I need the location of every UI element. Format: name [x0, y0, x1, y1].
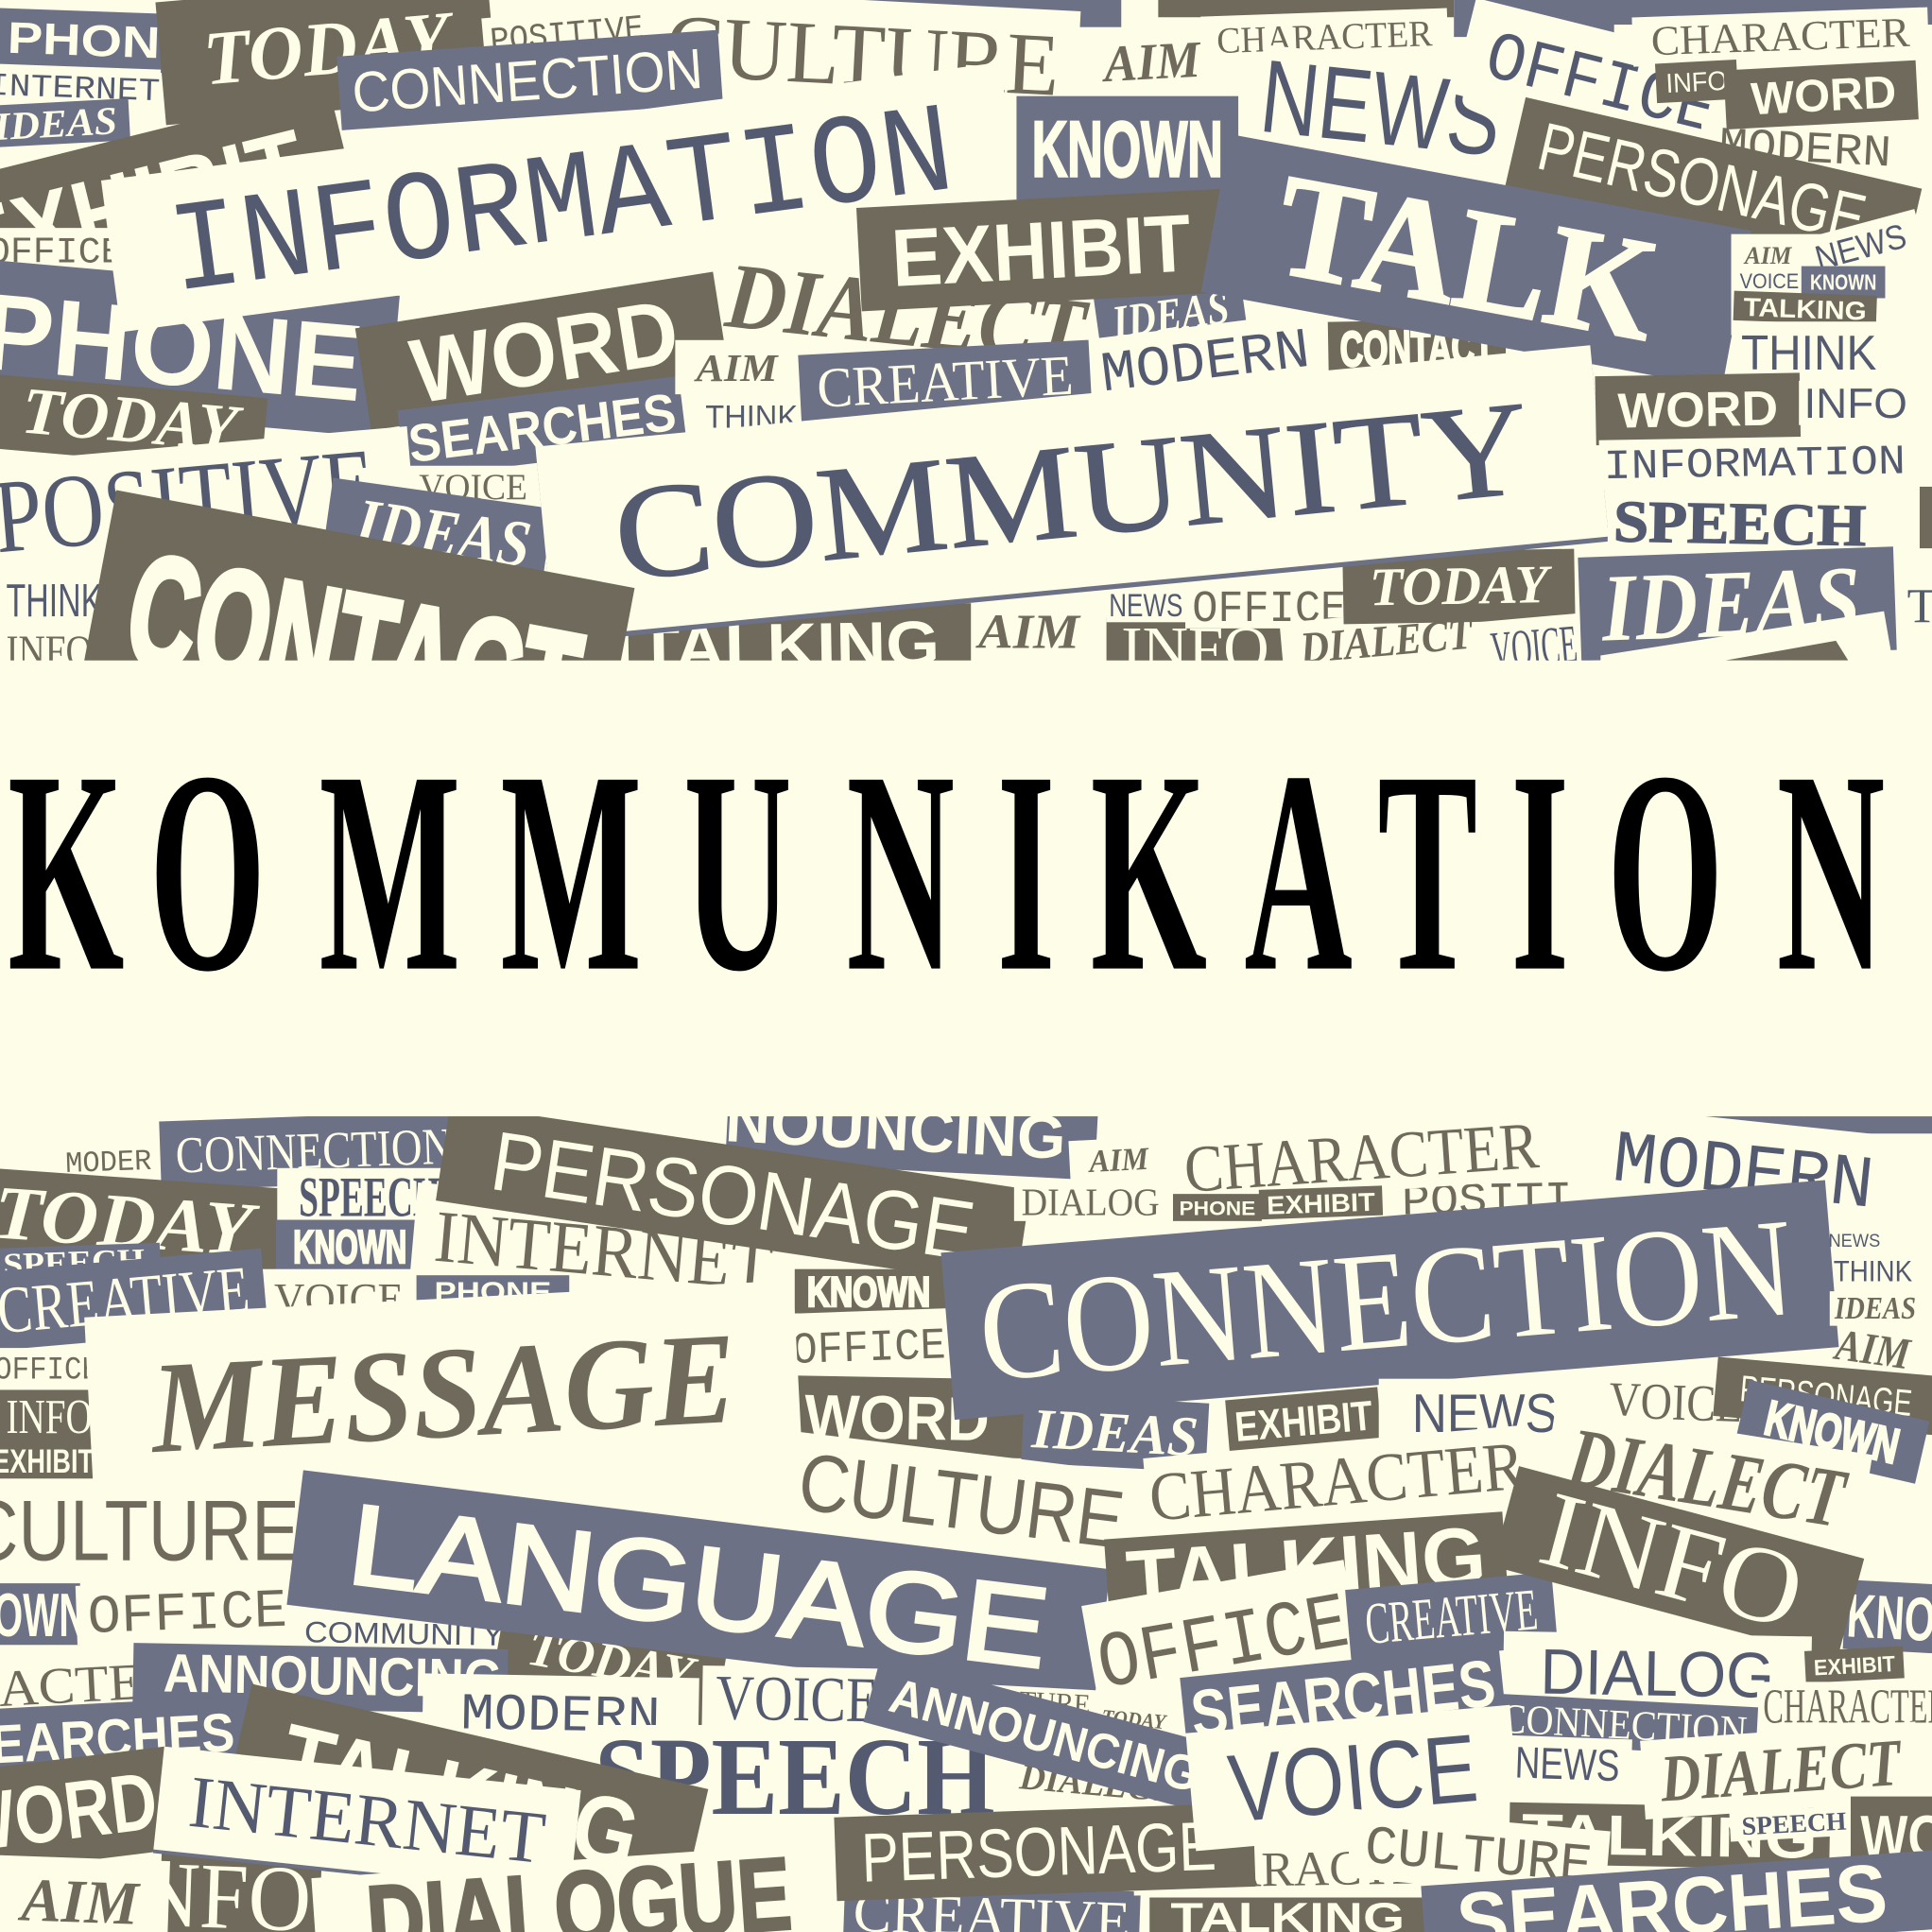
tag: MODERN lower: MODERN: [460, 1685, 661, 1748]
tag: CULTURE tiny: CULTURE: [966, 1682, 1091, 1721]
tag: COMMUNITY: [535, 345, 1609, 643]
tag: TALKING middle: TALKING: [1124, 1509, 1489, 1628]
tag: CREATIVE left: CREATIVE: [0, 1252, 252, 1348]
tag: DIALECT tiny: DIALECT: [1017, 1756, 1177, 1810]
tag: NEWS tiny right: NEWS: [1828, 1231, 1880, 1251]
tag: SEARCHES middle: SEARCHES: [1187, 1645, 1499, 1751]
tag: PERSONAGE lower: PERSONAGE: [860, 1808, 1217, 1897]
tag: CONTACT small: CONTACT: [1339, 319, 1494, 377]
tag: VOICE left: VOICE: [419, 467, 527, 508]
tag: INTERNET lower: [153, 1747, 581, 1897]
tag: PHONE small bottom: [417, 1275, 569, 1308]
tag: MODERN bottom: [1567, 1103, 1932, 1238]
tag: THINK tiny right: THINK: [1834, 1255, 1912, 1288]
tag: INFO low: INFO: [1121, 615, 1269, 683]
tag: VOICE low: [1476, 612, 1592, 682]
tag: AIM right: AIM: [1830, 1320, 1915, 1380]
tag: EXHIBIT: EXHIBIT: [889, 198, 1193, 304]
tag: CHARACTER top: CHARACTER: [1216, 13, 1434, 61]
tag: DIALECT right: DIALECT: [1561, 1411, 1854, 1546]
tag: NEWS lower: [1379, 1379, 1591, 1448]
right word cluster: [1828, 1231, 1932, 1380]
tag: CREATIVE lower: CREATIVE: [1363, 1576, 1540, 1657]
tag: TODAY low: TODAY: [1369, 555, 1553, 617]
tag: CONNECTION bottom small: CONNECTION: [175, 1116, 454, 1184]
tag: MESSAGE: [84, 1280, 802, 1505]
tag: OFFICE rotated: OFFICE: [1477, 19, 1724, 151]
tag: CONTACT: CONTACT: [114, 521, 593, 778]
tag: WN left: [0, 1580, 86, 1649]
tag: MODERN bottom: MODERN: [1609, 1119, 1877, 1230]
tag: SPEECH large: SPEECH: [595, 1716, 995, 1838]
tag: WORD right: WORD: [1617, 382, 1779, 440]
tag: VOICE bottom: VOICE: [274, 1275, 404, 1324]
tag: EXHIBIT tiny: EXHIBIT: [1267, 1187, 1376, 1220]
tag: INFORMATION: INFORMATION: [162, 81, 962, 329]
tag: AIM tiny: AIM: [1743, 242, 1792, 269]
tag: KNOWN bottom: [276, 1220, 419, 1274]
tag: POSITIVE top: POSITIVE: [489, 9, 646, 61]
tag: OFFICE low: OFFICE: [1192, 585, 1346, 635]
tag: INFO large: [1491, 1458, 1867, 1666]
tag: WORD top right: WORD: [1750, 66, 1898, 125]
tag: SPEECH bottom: [277, 1166, 450, 1229]
tag: AIM mid: AIM: [693, 347, 780, 390]
tag: THINK mid: THINK: [705, 399, 798, 435]
tag: NEWS low: NEWS: [1109, 588, 1182, 624]
tag: CHARACTER top right: CHARACTER: [1650, 9, 1911, 64]
word collage: top section: [0, 0, 1932, 794]
tag: COMMUNITY: COMMUNITY: [608, 372, 1536, 609]
tag: DIALOG bottom: DIALOG: [1022, 1181, 1160, 1224]
tag: DIALECT: DIALECT: [720, 244, 1093, 385]
tag: AIM bottom: [1068, 1136, 1169, 1183]
tag: AIM bottom: AIM: [1087, 1142, 1151, 1180]
tag: WORD: WORD: [405, 281, 685, 423]
tag: TODAY low middle: TODAY: [524, 1618, 701, 1704]
tag: PHONE: PHON: [7, 13, 161, 67]
tag: EXHIBIT lower: EXHIBIT: [1233, 1392, 1374, 1451]
word collage: bottom section: [0, 1080, 1932, 1932]
tag: SPEECH right: SPEECH: [1613, 488, 1867, 559]
tag: CONNECTION large: CONNECTION: [974, 1190, 1799, 1411]
tag: LANGUAGE: [286, 1470, 1111, 1704]
tag: MODERN right: MODERN: [1717, 121, 1892, 181]
tag: INFO small: INFO: [1665, 66, 1728, 99]
tag: MODERN right: [1699, 115, 1911, 181]
tag: TALKING small: TALKING: [1743, 292, 1867, 326]
tag: KNOWN tiny: KNOWN: [1810, 269, 1876, 294]
tag: VOICE middle: VOICE: [716, 1662, 879, 1735]
tag: CONNECTION lower: CONNECTION: [1500, 1696, 1749, 1754]
tag: PHONE tiny: [1173, 1194, 1262, 1221]
tag: INFO low left: INFO: [7, 627, 93, 676]
tag: TALK: [1201, 132, 1751, 388]
tag: IDEAS lower: IDEAS: [1029, 1397, 1199, 1468]
tag: THINK low left: THINK: [7, 575, 102, 627]
tag: KNOWN tiny: [1802, 267, 1885, 298]
tag: PERSONAGE right: [1713, 1357, 1932, 1435]
tag: CREATIVE lower: [1345, 1572, 1558, 1664]
tag: IDEAS left low: IDEAS: [351, 485, 535, 582]
small word cluster: [1732, 209, 1932, 336]
tag: VOICE low: VOICE: [1489, 614, 1579, 681]
tag: MODERN small left: MODER: [65, 1146, 152, 1182]
tag: CULTURE bottom: CULTURE: [1362, 1818, 1595, 1898]
tag: OFFICE middle: OFFICE: [791, 1321, 947, 1377]
tag: CONTACT: [78, 490, 634, 794]
tag: OFFICE left bottom: OFFICE: [87, 1581, 288, 1649]
tag: SPEECH small: SPEECH: [3, 1243, 146, 1283]
tag: CHARACTER bottom low: CHARACTER: [1158, 1840, 1455, 1899]
tag: VOICE tiny: VOICE: [1740, 269, 1799, 293]
tag: TALKING bottom: [1149, 1895, 1425, 1932]
tag: SPEECH tiny: SPEECH: [1741, 1807, 1847, 1840]
tag: TODAY low: [1342, 549, 1576, 624]
tag: NEWS bottom: NEWS: [1514, 1737, 1620, 1790]
tag: PHONE small bottom: PHONE: [435, 1278, 551, 1308]
tag: AIM low: [971, 600, 1099, 662]
tag: INTERNET lower: INTERNET: [185, 1760, 549, 1879]
tag: AIM bottom left: [0, 1855, 170, 1932]
tag: AIM top: AIM: [1100, 30, 1203, 93]
tag: INFO right: INFO: [1803, 381, 1907, 427]
tag: NEWS top: NEWS: [1255, 39, 1507, 179]
tag: AIM mid: [675, 340, 799, 394]
title band: [0, 661, 1932, 1116]
tag: ANNOUNCING rotated: ANNOUNCING: [884, 1668, 1205, 1803]
tag: IDEAS right: IDEAS: [1599, 545, 1862, 662]
tag: DIALECT low: DIALECT: [1298, 609, 1476, 673]
tag: CONNECTION top: CONNECTION: [350, 37, 705, 125]
tag: TODAY left: TODAY: [19, 373, 246, 467]
tag: KNOWN brown: KNOWN: [807, 1269, 930, 1316]
tag: PHONE: [0, 8, 186, 74]
tag: ANNOUNCING left: ANNOUNCING: [163, 1644, 503, 1710]
tag: COMMUNITY small: COMMUNITY: [304, 1615, 505, 1652]
tag: cream wedge under IDEAS: [1600, 612, 1892, 661]
tag: TODAY top: [155, 0, 497, 125]
tag: INFORMATION right: INFORMATION: [1603, 440, 1906, 492]
tag: KNOWN top: KNOWN: [1032, 104, 1223, 193]
tag: IDEAS mid: IDEAS: [1108, 281, 1233, 349]
title: KOMMUNIKATION: KOMMUNIKATION: [8, 711, 1885, 1031]
tag: EXHIBIT tiny right: EXHIBIT: [1813, 1651, 1896, 1680]
tag: CHARACTER lower: CHARACTER: [1147, 1426, 1527, 1536]
tag: KNOWN top: [1016, 96, 1238, 199]
tag: VOICE large: VOICE: [1224, 1714, 1481, 1843]
tag: TALK: TALK: [1265, 145, 1669, 371]
tag: CREATIVE top: CREATIVE: [816, 344, 1075, 420]
tag: INFO large: INFO: [1529, 1468, 1816, 1652]
tag: MESSAGE: MESSAGE: [146, 1305, 739, 1480]
tag: ANNOUNCING top: ANNOUNCING: [633, 1080, 1067, 1172]
tag: DIALOG right: DIALOG: [1540, 1637, 1775, 1712]
tag: TALKING bottom right: TALKING: [1521, 1802, 1818, 1871]
tag: SPEECH bottom: SPEECH: [299, 1166, 440, 1229]
tag: MODERN rotated: MODERN: [1097, 319, 1314, 408]
tag: OFFICE rotated bottom: OFFICE: [1092, 1580, 1355, 1712]
tag: CONTACT small: [1328, 319, 1506, 377]
tag: INTERNET bottom top: INTERNET: [431, 1195, 776, 1306]
tag: SEARCHES top: SEARCHES: [405, 382, 679, 474]
tag: INFO small: [1655, 60, 1738, 103]
tag: AIM low: AIM: [975, 606, 1081, 660]
tag: WORD lower: WORD: [804, 1382, 990, 1454]
tag: PERSONAGE bottom: PERSONAGE: [486, 1113, 980, 1278]
tag: THINK right: THINK: [1741, 326, 1877, 381]
tag: top purple strip: [727, 0, 1932, 37]
tag: EXHIBIT tiny right: [1804, 1646, 1905, 1683]
tag: far right letters: [1907, 487, 1932, 633]
tag: KNOWN bottom: KNOWN: [293, 1221, 406, 1273]
tag: TODAY low middle: [491, 1597, 730, 1729]
tag: IDEAS tiny right: IDEAS: [1834, 1291, 1916, 1326]
tag: INFO left lower: INFO: [7, 1390, 93, 1444]
tag: TODAY tiny: TODAY: [1100, 1704, 1168, 1734]
tag: CULTURE lower: CULTURE: [794, 1437, 1129, 1566]
tag: TALKING top: TALKING: [637, 609, 940, 685]
tag: POSITIVE left: POSITIVE: [0, 426, 380, 575]
tag: MODERN small left: [48, 1136, 168, 1185]
tag: CHARACTER bottom: CHARACTER: [1182, 1109, 1541, 1207]
tag: NEWS small: NEWS: [1811, 216, 1910, 278]
tag: TALKING lower left: TALKING: [270, 1703, 649, 1889]
tag: LANGUAGE: LANGUAGE: [342, 1481, 1055, 1692]
tag: purple top right: [1688, 1116, 1932, 1133]
tag: MODERN lower: [422, 1673, 699, 1752]
tag: VOICE lower: VOICE: [1608, 1371, 1743, 1433]
tag: COMMUNITY small: [289, 1610, 511, 1658]
tag: PHONE tiny: PHONE: [1180, 1198, 1255, 1219]
tag: WORD top right: [1724, 60, 1919, 129]
tag: WORD right: [1596, 372, 1801, 445]
tag: POSITIVE bottom: POSITIVE: [1401, 1175, 1630, 1229]
tag: NEWS lower: NEWS: [1412, 1384, 1558, 1444]
